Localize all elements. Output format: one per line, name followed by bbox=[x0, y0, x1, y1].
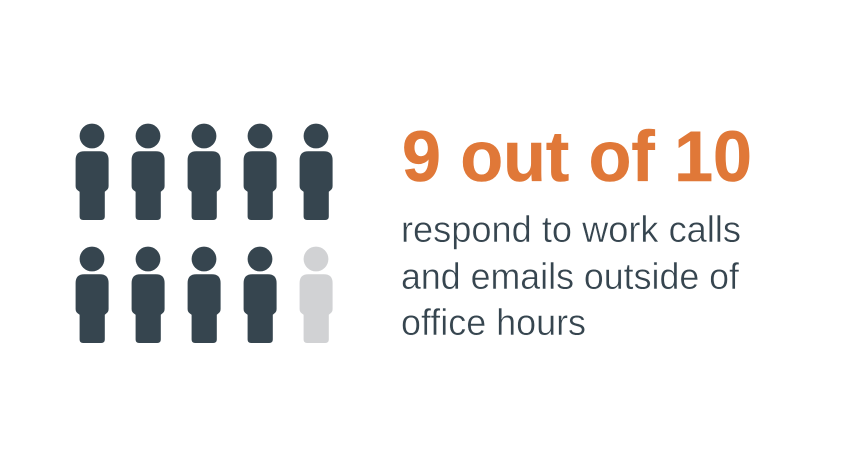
person 6 bbox=[76, 247, 109, 343]
heading: 9 out of 10 bbox=[402, 118, 752, 197]
description text: respond to work calls bbox=[401, 209, 741, 250]
person 4 bbox=[244, 124, 277, 220]
person 10: grey bbox=[300, 247, 333, 343]
person 1 bbox=[76, 124, 109, 220]
description text bbox=[401, 209, 741, 343]
description text: office hours bbox=[401, 302, 586, 343]
person 7 bbox=[132, 247, 165, 343]
description text: and emails outside of bbox=[401, 256, 740, 297]
person 9 bbox=[244, 247, 277, 343]
pictogram: 9 of 10 people highlighted bbox=[76, 124, 333, 343]
person 3 bbox=[188, 124, 221, 220]
person 5 bbox=[300, 124, 333, 220]
person 8 bbox=[188, 247, 221, 343]
person 2 bbox=[132, 124, 165, 220]
